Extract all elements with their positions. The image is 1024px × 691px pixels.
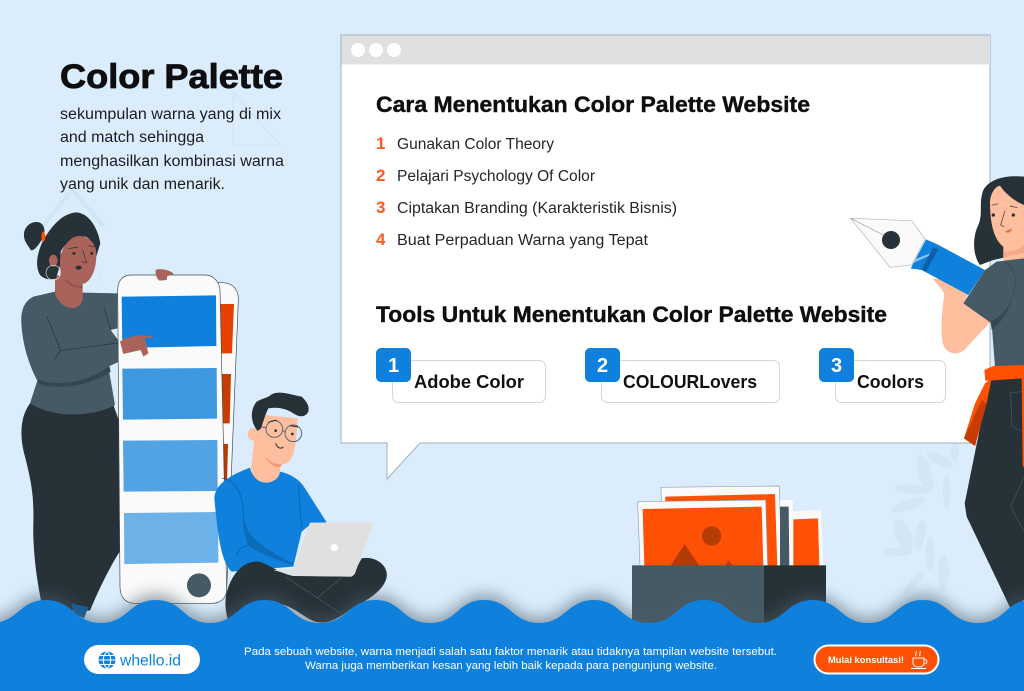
ear bbox=[248, 428, 258, 441]
neck bbox=[55, 275, 83, 308]
back large photo bbox=[661, 486, 782, 567]
pen highlight bbox=[914, 253, 930, 263]
tool card: COLOURLovers: COLOURLovers bbox=[623, 372, 757, 392]
tool card: COLOURLovers bbox=[585, 348, 780, 402]
tool card: Adobe Color bbox=[376, 348, 546, 402]
illustration: woman with color swatch and seated man bbox=[21, 212, 387, 623]
footer text: Warna juga memberikan kesan yang lebih baik kepada para pengunjung website. bbox=[305, 660, 717, 672]
title: Color Palette bbox=[60, 58, 283, 96]
description text: and match sehingga bbox=[60, 129, 204, 146]
sock bbox=[72, 603, 88, 618]
pen nib bbox=[851, 218, 925, 267]
footer wave bbox=[0, 600, 1024, 691]
pen woman head bbox=[974, 176, 1024, 265]
face details bbox=[992, 204, 1017, 233]
description text: menghasilkan kombinasi warna bbox=[60, 153, 284, 170]
face bbox=[60, 236, 96, 284]
pen barrel bbox=[911, 239, 985, 295]
panel: speech bubble browser window bbox=[341, 35, 990, 479]
neck and head bbox=[251, 415, 298, 483]
decorative faint letter shape and frame bbox=[43, 92, 280, 226]
man hair bbox=[252, 393, 309, 431]
legs bbox=[225, 558, 387, 623]
pants bbox=[21, 403, 121, 611]
description text: sekumpulan warna yang di mix bbox=[60, 106, 281, 123]
pants bbox=[965, 378, 1024, 607]
numbered list: 1 bbox=[376, 134, 385, 153]
tool card: Adobe Color: Adobe Color bbox=[414, 372, 524, 392]
seated man bbox=[214, 393, 387, 623]
hair bun bbox=[24, 222, 44, 250]
hair bbox=[974, 176, 1024, 265]
woman head bbox=[24, 212, 101, 308]
orange waist tie bbox=[964, 365, 1024, 467]
illustration: woman with pen bbox=[851, 176, 1024, 607]
tool card: COLOURLovers: 2 bbox=[597, 355, 608, 377]
box bbox=[632, 565, 826, 629]
neck bbox=[1003, 242, 1024, 263]
logo pill: whello.id bbox=[119, 652, 181, 670]
leg lines bbox=[285, 577, 343, 615]
tool card: Coolors: 3 bbox=[831, 355, 842, 377]
pants pocket lines bbox=[1010, 392, 1024, 532]
chin shadow bbox=[266, 457, 282, 467]
decorative background leaves bbox=[883, 438, 959, 597]
shirt lines bbox=[222, 478, 302, 555]
numbered list: Buat Perpaduan Warna yang Tepat bbox=[397, 232, 649, 249]
logo pill bbox=[84, 645, 200, 674]
pen band bbox=[922, 247, 938, 272]
tool card: Coolors bbox=[819, 348, 946, 402]
neck shadow bbox=[1003, 245, 1024, 257]
numbered list: 3 bbox=[376, 198, 385, 217]
front photo bbox=[638, 500, 768, 567]
illustration: photo box bbox=[632, 486, 826, 629]
face bbox=[990, 186, 1024, 250]
tool card: Adobe Color: 1 bbox=[388, 355, 399, 377]
numbered list bbox=[376, 134, 677, 249]
sweater fold lines bbox=[47, 307, 120, 361]
numbered list: Gunakan Color Theory bbox=[397, 136, 554, 153]
woman hands bbox=[120, 269, 174, 357]
footer text: Pada sebuah website, warna menjadi salah satu faktor menarik atau tidaknya tampilan website tersebut. bbox=[244, 646, 777, 658]
heading: cara menentukan: Cara Menentukan Color Palette Website bbox=[376, 92, 810, 117]
numbered list: 4 bbox=[376, 230, 386, 249]
ear, hair tie and earrings bbox=[41, 232, 101, 289]
numbered list: Ciptakan Branding (Karakteristik Bisnis) bbox=[397, 200, 677, 217]
description text bbox=[60, 106, 284, 193]
back swatch card bbox=[213, 283, 238, 602]
description text: yang unik dan menarik. bbox=[60, 176, 225, 193]
face details bbox=[66, 246, 95, 287]
shirt bbox=[963, 258, 1024, 367]
shirt bbox=[214, 468, 327, 572]
glasses and face details bbox=[262, 420, 302, 448]
small dark photo bbox=[780, 500, 794, 567]
shirt seam bbox=[1005, 262, 1015, 295]
numbered list: Pelajari Psychology Of Color bbox=[397, 168, 595, 185]
hair bbox=[37, 212, 100, 279]
heading: tools: Tools Untuk Menentukan Color Palette Website bbox=[376, 302, 887, 327]
numbered list: 2 bbox=[376, 166, 385, 185]
front swatch phone bbox=[118, 275, 227, 603]
shirt shadow bbox=[991, 295, 1013, 330]
consult button: Mulai konsultasi! bbox=[828, 655, 904, 666]
right photo bbox=[793, 510, 823, 567]
sweater shading bbox=[37, 366, 111, 387]
consult button bbox=[814, 646, 938, 674]
sweater bbox=[21, 292, 124, 414]
forearm and hand bbox=[933, 278, 991, 353]
wave shadow bbox=[0, 595, 1024, 686]
footer text bbox=[244, 646, 777, 672]
laptop bbox=[273, 522, 373, 577]
shirt shadow bbox=[243, 513, 293, 565]
tool card: Coolors: Coolors bbox=[857, 372, 924, 392]
